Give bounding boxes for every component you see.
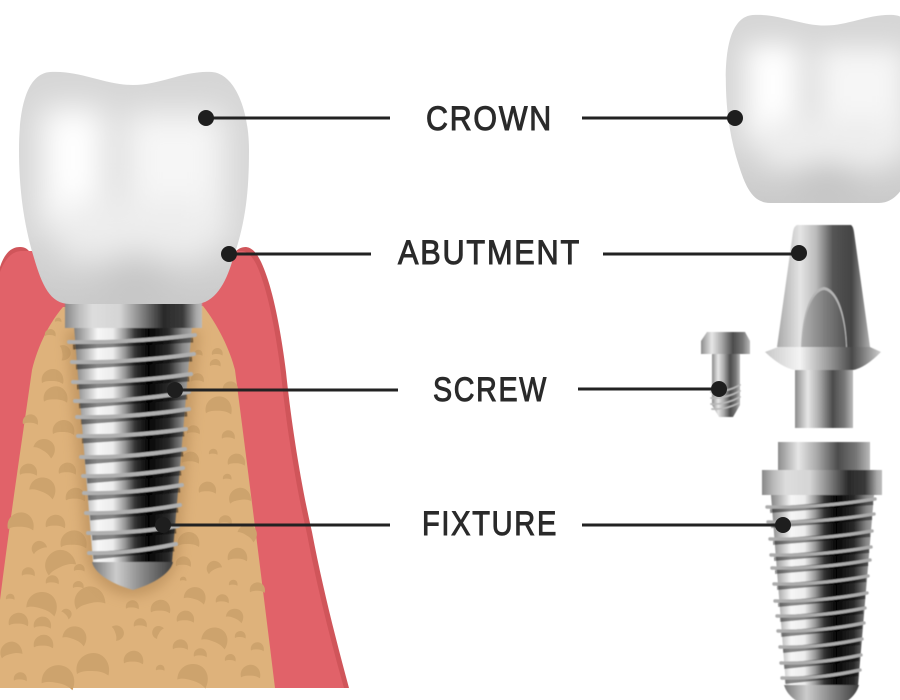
fixture collar [762,470,882,495]
fixture tip [92,562,173,590]
panel: assembled implant in gum [0,72,349,690]
threads [69,335,195,553]
label: abutment leaders [221,245,807,262]
text: SCREW: SCREW [433,371,548,409]
abutment flange [765,347,881,370]
abutment cone [777,225,870,347]
fixture thread shadows [770,502,873,681]
implant shadow in bone [66,330,200,596]
screw threads [711,385,740,409]
abutment neck [795,365,853,428]
screw head [701,332,750,354]
panel: separated fixture [762,442,882,700]
fixture threads [767,499,875,678]
gum tissue [0,247,349,688]
abutment flat [801,287,847,347]
thread shadows [73,339,193,556]
label: screw leaders [167,381,727,398]
panel: separated abutment [765,225,881,428]
screw shaft [712,354,740,417]
jaw bone [0,306,275,690]
text: CROWN: CROWN [426,100,553,138]
text: ABUTMENT: ABUTMENT [398,234,581,272]
panel: separated screw [701,332,750,417]
fixture neck [778,442,870,471]
fixture in bone [65,300,202,590]
abutment collar [65,300,202,328]
panel: separated crown [726,15,900,213]
bone pores [0,318,265,690]
label: fixture leaders [155,517,791,533]
crown on implant [19,72,249,317]
label: crown leaders [198,110,743,126]
fixture tip [784,685,859,700]
fixture body [771,495,874,686]
text: FIXTURE: FIXTURE [422,505,558,543]
